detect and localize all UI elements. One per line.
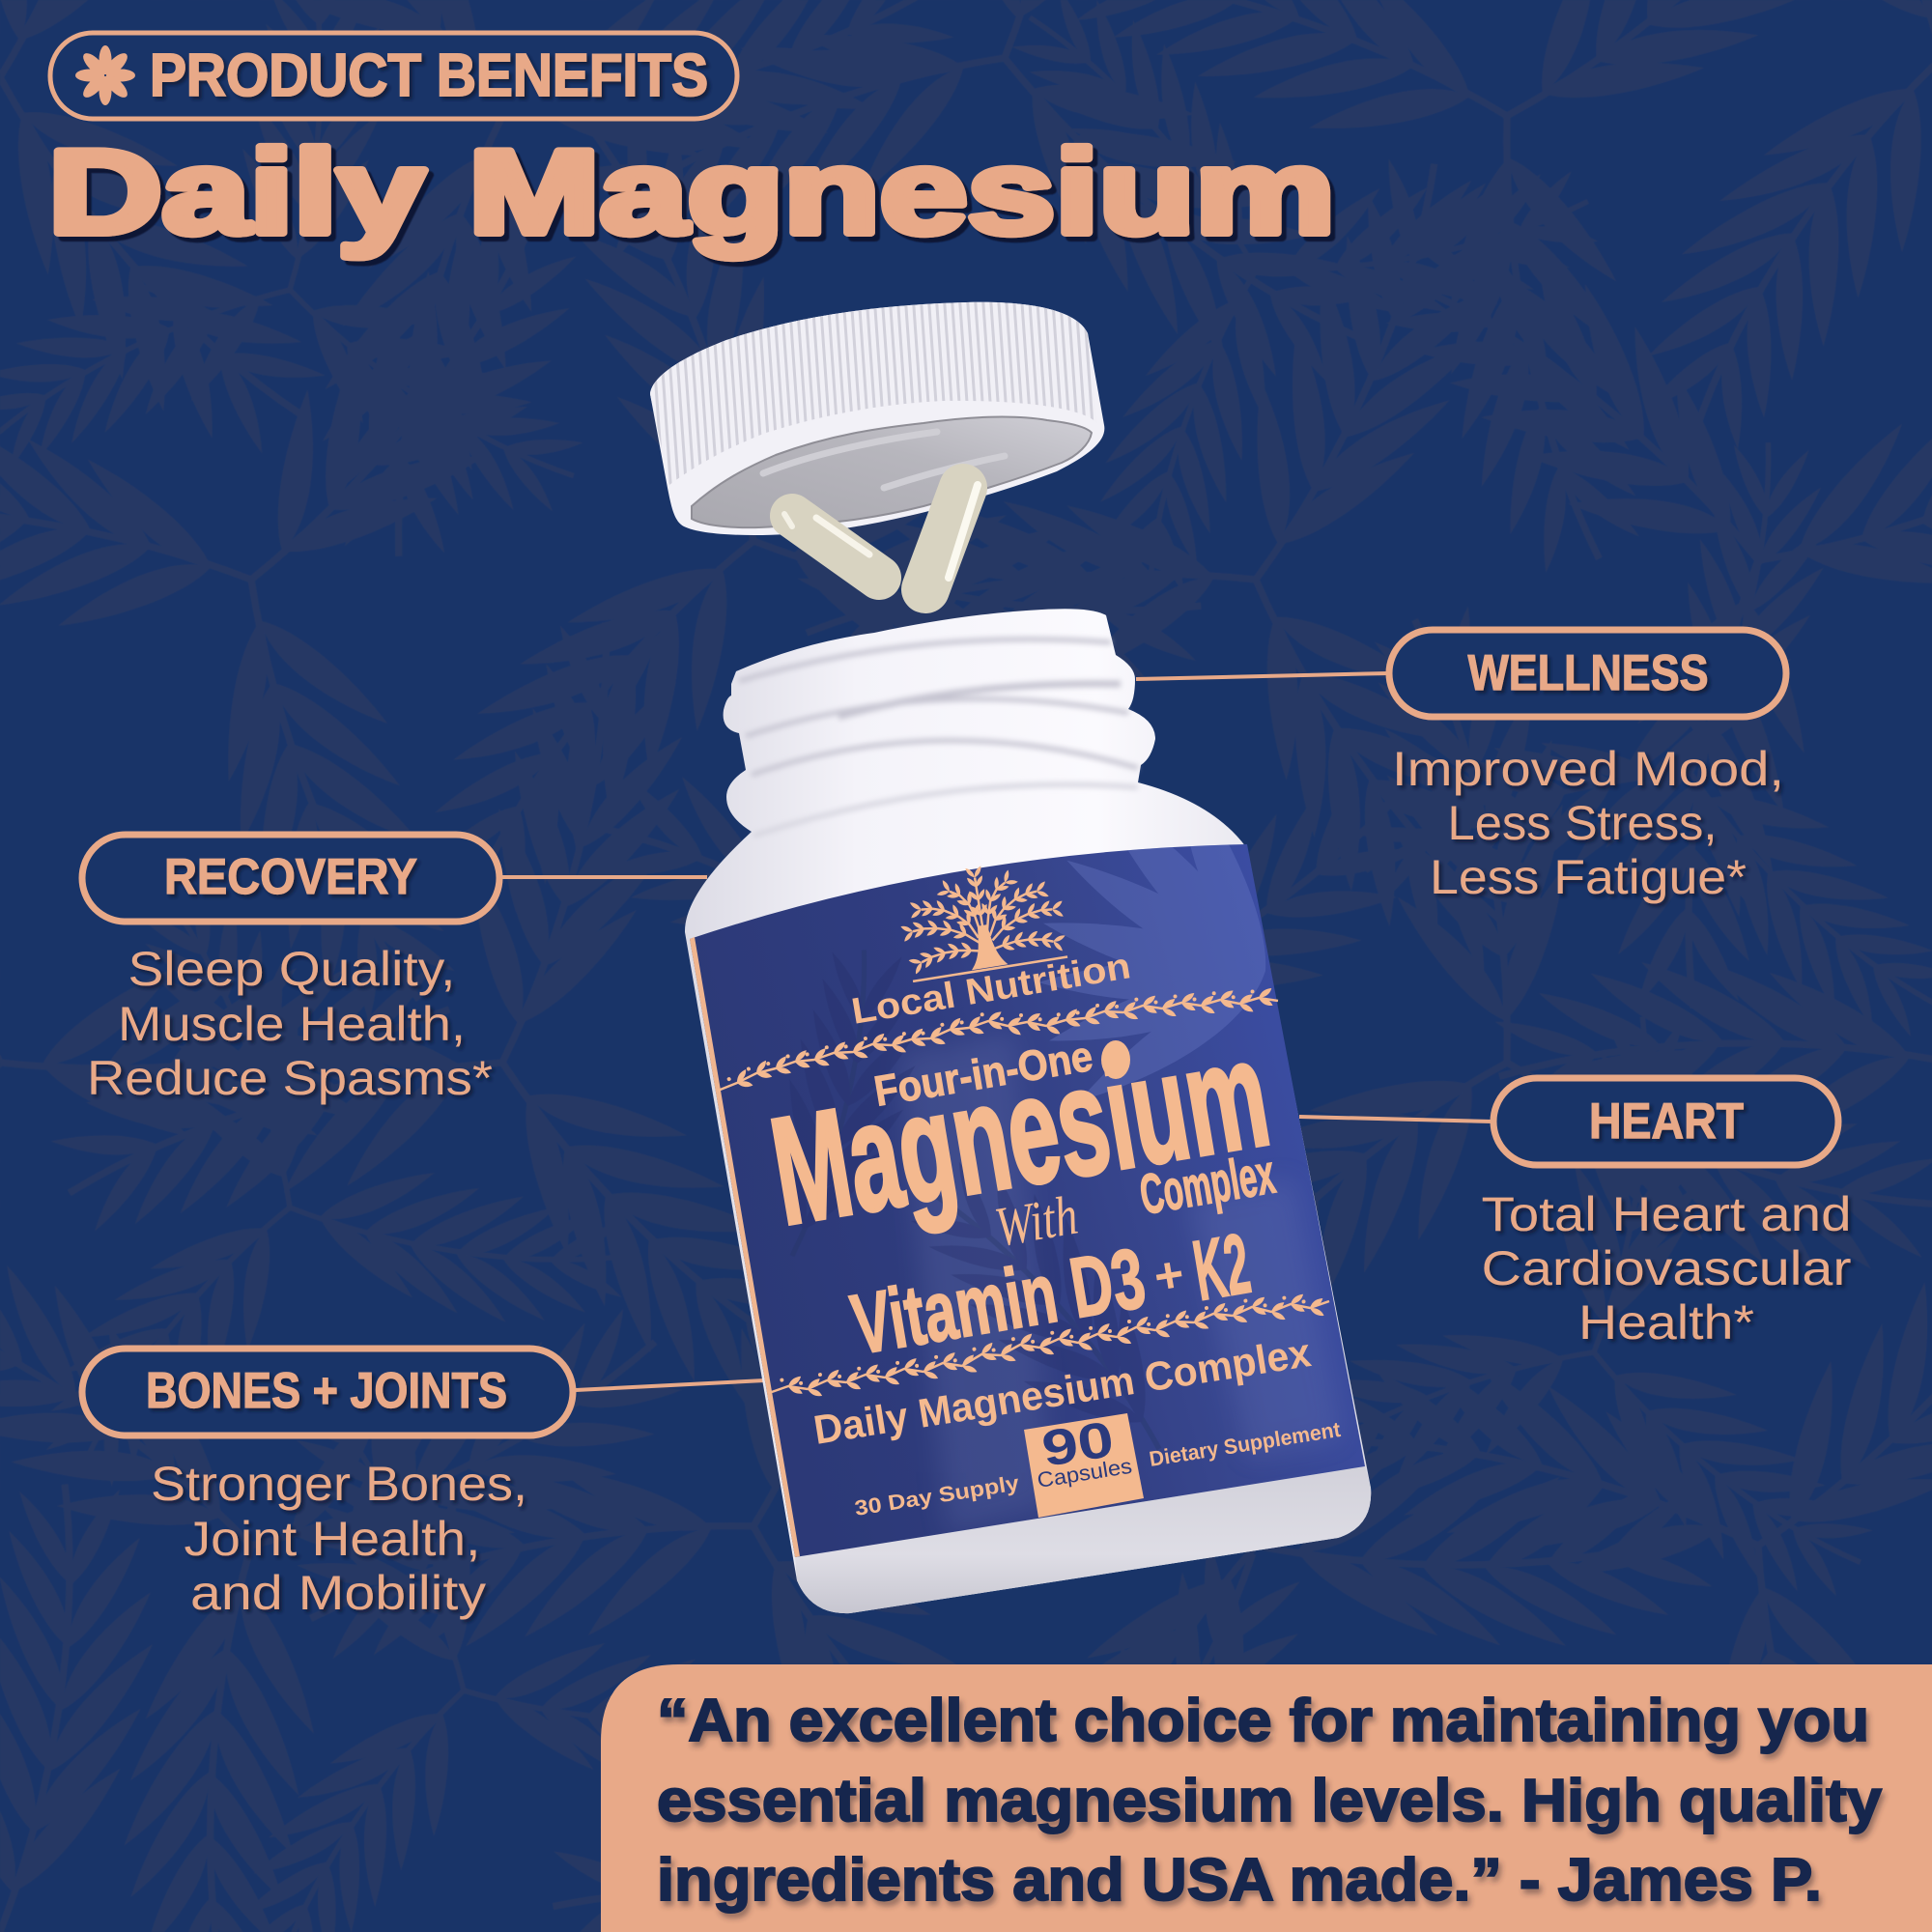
recovery text: Reduce Spasms*: [87, 1051, 493, 1105]
capsule: lower: [784, 514, 879, 578]
wellness text: Less Fatigue*: [1430, 850, 1747, 904]
capsule count box: Capsules: [1036, 1454, 1134, 1492]
heart text: Total Heart and: [1482, 1187, 1851, 1241]
bones text: Stronger Bones,: [151, 1457, 527, 1511]
bottle body: [685, 609, 1371, 1613]
vine upper: [718, 998, 1278, 1091]
quote text: essential magnesium levels. High quality: [657, 1768, 1883, 1834]
bottle cap: [638, 290, 1111, 535]
label supplement: Dietary Supplement: [1148, 1417, 1343, 1471]
connector lines: [502, 673, 1492, 1390]
capsule: upper: [925, 485, 978, 589]
callout: heart: [1482, 1078, 1851, 1350]
label four-in-one: Four-in-One: [871, 1033, 1096, 1116]
label plus: +: [1150, 1246, 1188, 1306]
label vitamin: Vitamin D3: [845, 1230, 1151, 1373]
bones text: and Mobility: [190, 1566, 486, 1620]
heart text: Cardiovascular: [1482, 1241, 1851, 1295]
label brand: Local Nutrition: [849, 946, 1133, 1033]
wellness text: [1392, 742, 1784, 904]
label supply: 30 Day Supply: [853, 1470, 1022, 1520]
callout: bones and joints: [82, 1349, 573, 1620]
callout: wellness: WELLNESS: [1468, 645, 1708, 701]
quote text: “An excellent choice for maintaining you: [657, 1688, 1869, 1754]
cap ribs: [650, 301, 1094, 485]
bottle lower band: [795, 1466, 1371, 1613]
badge text: PRODUCT BENEFITS: [150, 43, 708, 109]
label with: With: [990, 1183, 1082, 1259]
badge: product benefits: [50, 33, 737, 119]
wellness text: Less Stress,: [1447, 796, 1718, 850]
wellness text: Improved Mood,: [1392, 742, 1784, 796]
callout: heart: HEART: [1589, 1094, 1744, 1150]
label complex: Complex: [1135, 1143, 1279, 1227]
callout: recovery: [82, 835, 499, 1105]
bones text: [151, 1457, 527, 1620]
bottle neck threads: [739, 639, 1138, 836]
capsule count box: 90: [1038, 1411, 1118, 1478]
product bottle: [685, 609, 1371, 1613]
recovery text: Muscle Health,: [118, 997, 466, 1051]
bones text: Joint Health,: [184, 1512, 481, 1566]
callout: wellness: [1389, 630, 1786, 904]
icon: flower: [75, 45, 135, 105]
logo tree: [898, 866, 1067, 981]
callout: bones and joints: BONES + JOINTS: [146, 1363, 507, 1419]
quote text: [657, 1688, 1883, 1914]
label edge: [690, 937, 800, 1557]
heart text: Health*: [1578, 1295, 1754, 1350]
label k2: K2: [1187, 1215, 1256, 1319]
vine lower: [769, 1301, 1329, 1393]
label subtitle: Daily Magnesium Complex: [810, 1329, 1315, 1453]
recovery text: [87, 942, 493, 1105]
label magnesium: Magnesium: [761, 1008, 1280, 1258]
testimonial panel: [601, 1664, 1932, 1932]
capsule count box: [1024, 1411, 1144, 1518]
heart text: [1482, 1187, 1851, 1350]
cap interior: [692, 417, 1092, 527]
label magnesium: [761, 1008, 1280, 1258]
label artwork: [802, 844, 1333, 1526]
title: Daily Magnesium: [48, 127, 1335, 259]
quote text: ingredients and USA made.” - James P.: [657, 1847, 1822, 1914]
recovery text: Sleep Quality,: [128, 942, 456, 996]
callout: recovery: RECOVERY: [164, 849, 417, 905]
label panel: [690, 844, 1365, 1557]
